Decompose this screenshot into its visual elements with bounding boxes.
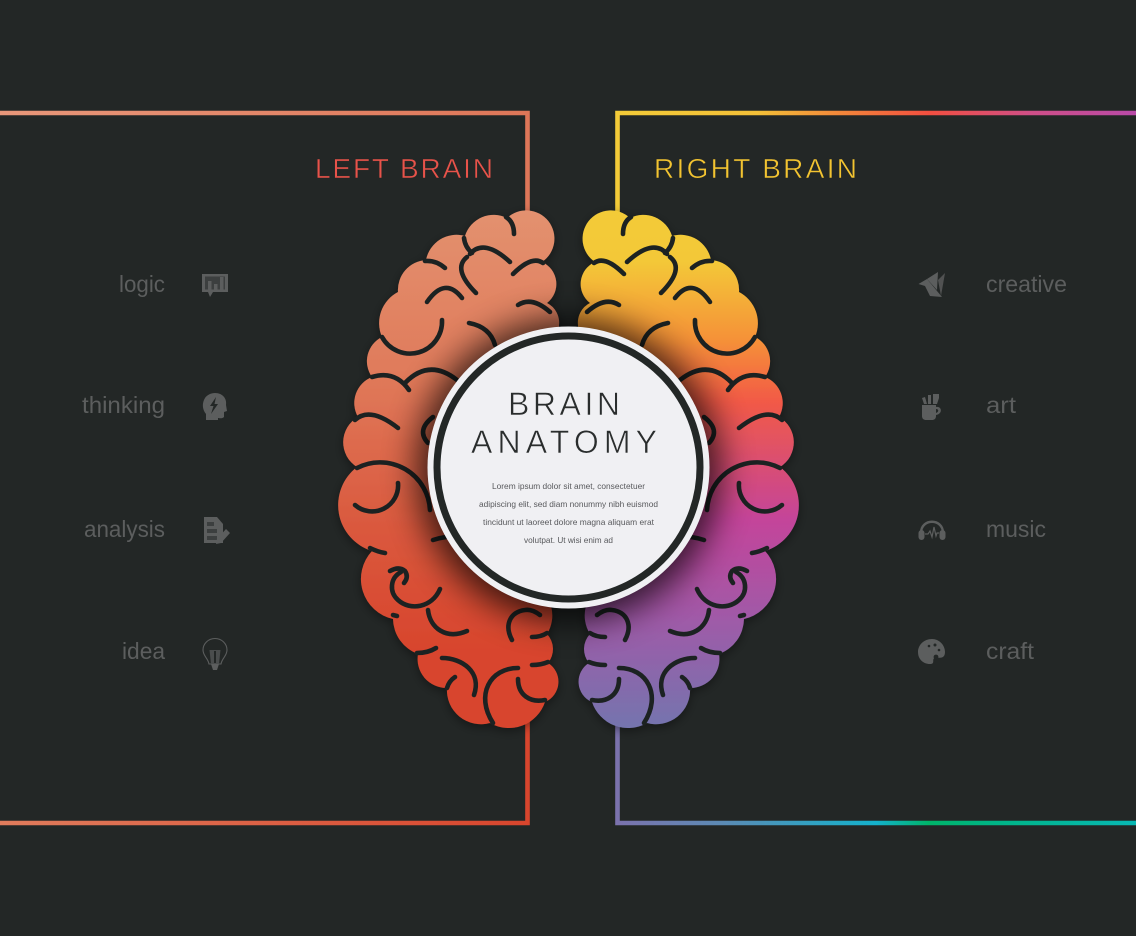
badge body text: adipiscing elit, sed diam nonummy nibh euismod	[479, 499, 658, 509]
left labels: logic	[119, 271, 165, 297]
left labels: analysis	[84, 516, 165, 542]
icon: document and pencil	[204, 517, 230, 544]
left labels	[82, 271, 165, 664]
icon: paint palette	[918, 639, 945, 664]
icon: origami bird	[918, 272, 945, 297]
brain: right hemisphere	[578, 210, 799, 728]
heading: right brain: RIGHT BRAIN	[654, 153, 857, 184]
badge body text	[479, 481, 658, 545]
left labels: thinking	[82, 392, 165, 418]
right labels: art	[986, 392, 1017, 418]
left labels: idea	[122, 638, 165, 664]
right labels: creative	[986, 271, 1067, 297]
icon: light bulb	[203, 638, 227, 670]
right labels: craft	[986, 638, 1035, 664]
brain: left hemisphere	[338, 210, 559, 728]
right labels	[986, 271, 1067, 664]
icon: mug with pencils	[922, 394, 941, 420]
frame: left brain top line	[0, 113, 528, 215]
centre circle shadow	[416, 318, 720, 622]
frame: right brain bottom line	[618, 720, 1136, 823]
frame: right brain top line	[618, 113, 1136, 215]
badge body text: volutpat. Ut wisi enim ad	[524, 535, 613, 545]
badge title	[471, 386, 657, 460]
icon: head with lightning	[203, 393, 227, 420]
centre badge	[428, 326, 710, 608]
right labels: music	[986, 516, 1046, 542]
badge title: ANATOMY	[471, 424, 657, 460]
frame: left brain bottom line	[0, 720, 528, 823]
heading: left brain: LEFT BRAIN	[315, 153, 493, 184]
icon: headphones with waveform	[918, 522, 946, 540]
icon: chart speech bubble	[202, 274, 228, 297]
badge title: BRAIN	[508, 386, 620, 422]
badge body text: tincidunt ut laoreet dolore magna aliquam erat	[483, 517, 655, 527]
badge body text: Lorem ipsum dolor sit amet, consectetuer	[492, 481, 645, 491]
